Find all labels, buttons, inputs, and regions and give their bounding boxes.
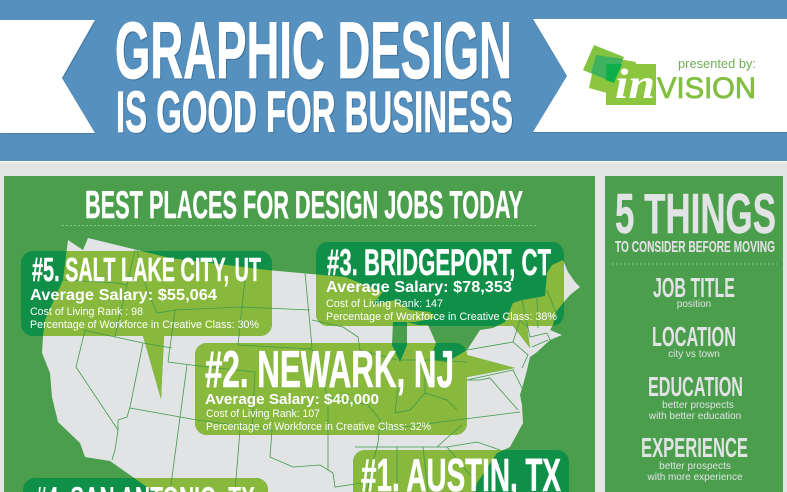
item: education: better prospects	[662, 400, 734, 411]
logo: invision: in	[615, 62, 655, 108]
callout #2 Newark: Percentage of Workforce in Creative Class: 32%	[206, 421, 431, 433]
callout #3 Bridgeport: Percentage of Workforce in Creative Class: 38%	[326, 311, 557, 323]
callout #2 Newark: #2. NEWARK, NJ	[205, 341, 454, 399]
callout #3 Bridgeport: #3. BRIDGEPORT, CT	[327, 242, 551, 283]
callout #5 Salt Lake City: #5. SALT LAKE CITY, UT	[32, 251, 261, 288]
item: education	[648, 371, 743, 422]
title	[115, 6, 513, 145]
callouts: map overlap layer	[42, 238, 580, 492]
callout #2 Newark	[205, 341, 454, 433]
logo: invision	[583, 45, 756, 108]
callout #2 Newark: Average Salary: $40,000	[205, 391, 379, 408]
callout #3 Bridgeport	[326, 242, 557, 323]
logo: invision: VISION	[657, 72, 756, 105]
item: education: with better education	[648, 411, 741, 422]
panel: 5 things	[605, 176, 783, 492]
item: experience	[641, 432, 748, 483]
callout #3 Bridgeport: Cost of Living Rank: 147	[326, 298, 443, 310]
item: job title: position	[677, 299, 711, 310]
item: job title	[653, 272, 735, 310]
logo: invision: presented by:	[678, 57, 756, 71]
callout #5 Salt Lake City: Percentage of Workforce in Creative Class: 30%	[30, 319, 259, 331]
item: location	[652, 321, 736, 360]
left ribbon	[0, 20, 95, 133]
callout #5 Salt Lake City: Average Salary: $55,064	[30, 287, 217, 304]
callout #3 Bridgeport: Average Salary: $78,353	[326, 279, 512, 296]
callout #2 Newark: Cost of Living Rank: 107	[206, 408, 320, 420]
right ribbon with logo	[533, 19, 787, 132]
item: experience: with more experience	[646, 472, 743, 483]
callout #5 Salt Lake City	[30, 251, 261, 331]
callouts: dark layer	[21, 242, 569, 492]
panel: best places	[4, 176, 595, 492]
callout #5 Salt Lake City: Cost of Living Rank : 98	[30, 306, 143, 318]
header banner	[0, 0, 787, 162]
item: location: city vs town	[668, 349, 720, 360]
item: experience: better prospects	[659, 461, 731, 472]
map of the USA	[42, 238, 580, 492]
state borders	[63, 250, 558, 492]
